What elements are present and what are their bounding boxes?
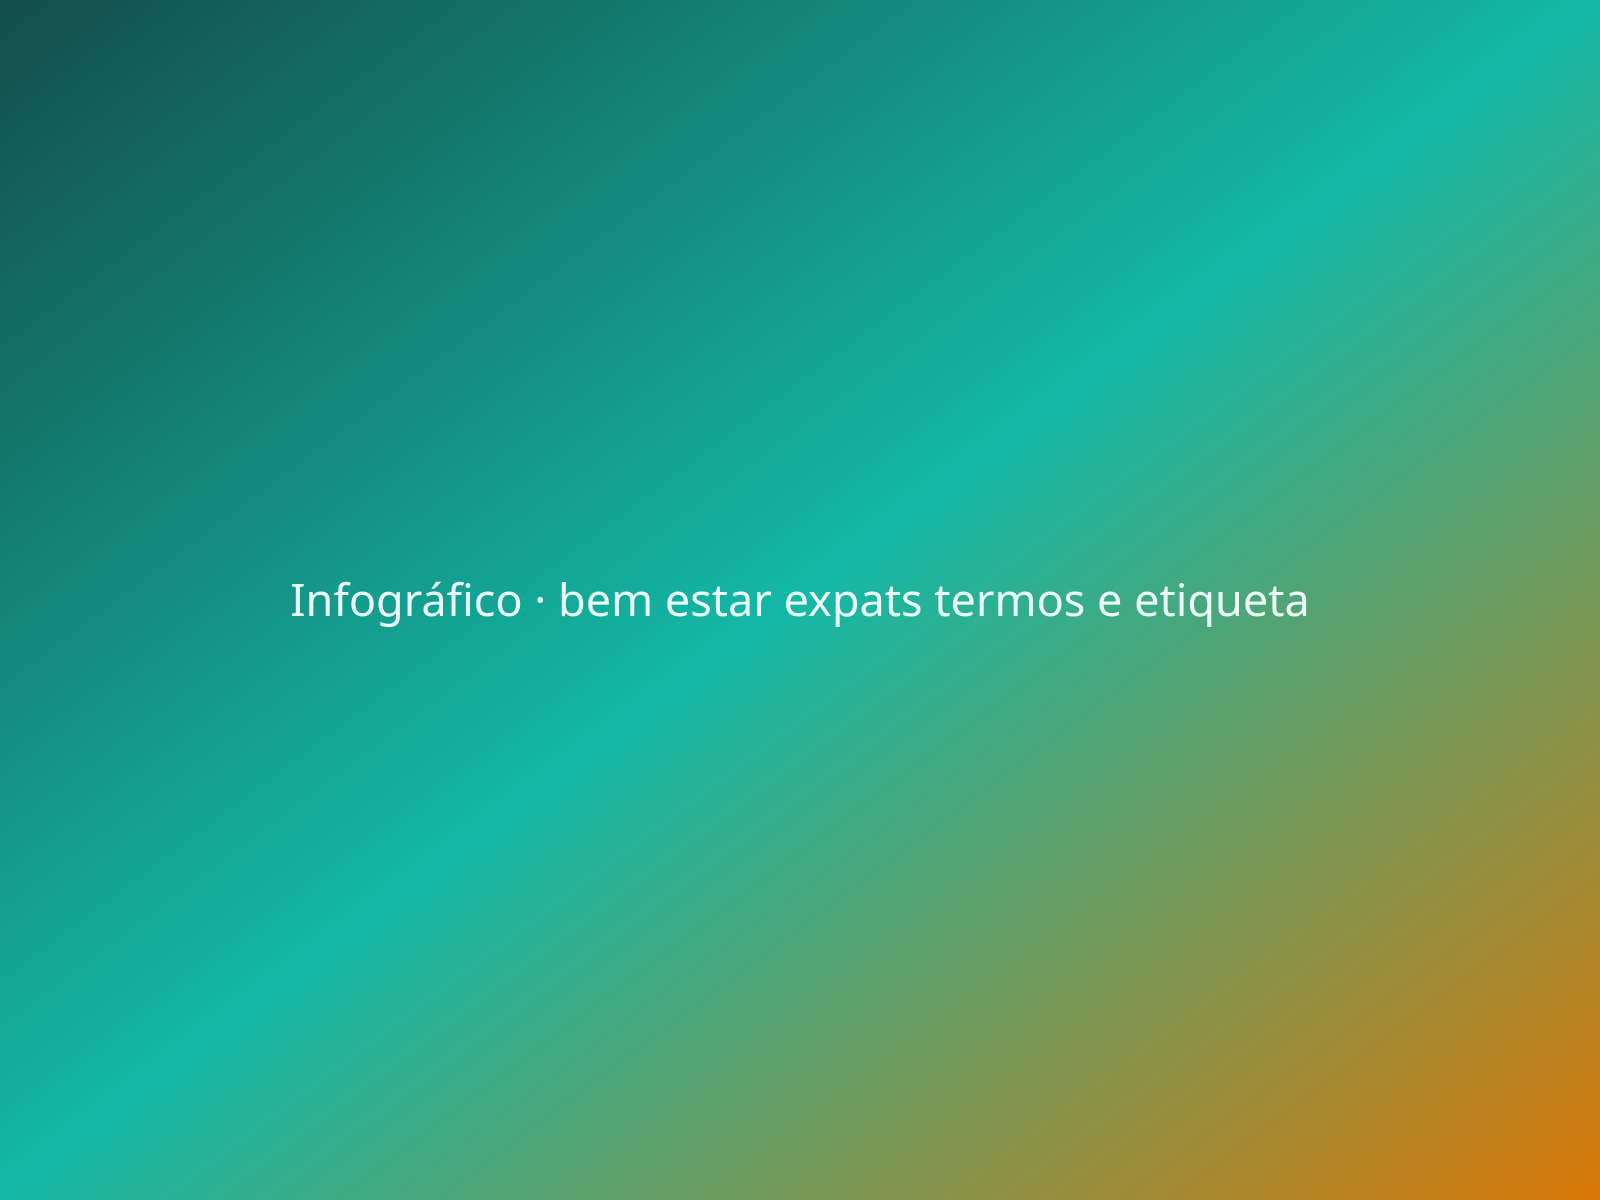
title: Infográfico · bem estar expats termos e etiqueta — [290, 569, 1310, 630]
